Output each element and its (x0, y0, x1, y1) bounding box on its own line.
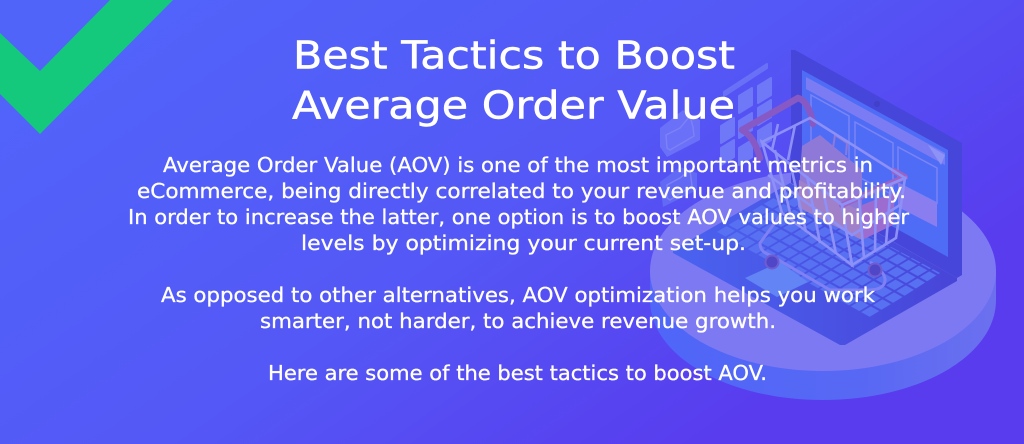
second paragraph: smarter, not harder, to achieve revenue growth. (260, 309, 776, 333)
icon: green check mark (0, 0, 173, 134)
intro paragraph: In order to increase the latter, one option is to boost AOV values to higher (128, 205, 910, 229)
second paragraph: As opposed to other alternatives, AOV optimization helps you work (161, 283, 875, 307)
illustration: laptop and shopping cart on a platform (650, 50, 996, 400)
shopping bag (798, 135, 895, 240)
cart wheels (766, 256, 778, 268)
intro paragraph (128, 153, 910, 255)
platform disc (650, 171, 996, 400)
laptop screen (791, 50, 962, 278)
title (292, 34, 735, 128)
intro paragraph: levels by optimizing your current set-up. (301, 231, 746, 255)
laptop base and keyboard (673, 183, 957, 345)
closing line: Here are some of the best tactics to boost AOV. (268, 361, 767, 385)
second paragraph (161, 283, 875, 333)
intro paragraph: Average Order Value (AOV) is one of the most important metrics in (163, 153, 873, 177)
title: Average Order Value (292, 84, 735, 128)
cart wire frame (760, 118, 905, 290)
cart handles (742, 98, 813, 158)
shopping cart (742, 98, 905, 290)
intro paragraph: eCommerce, being directly correlated to your revenue and profitability. (137, 179, 906, 203)
thumbs-up and app badges (660, 110, 700, 207)
title: Best Tactics to Boost (293, 34, 735, 78)
floating app tiles (721, 64, 771, 165)
